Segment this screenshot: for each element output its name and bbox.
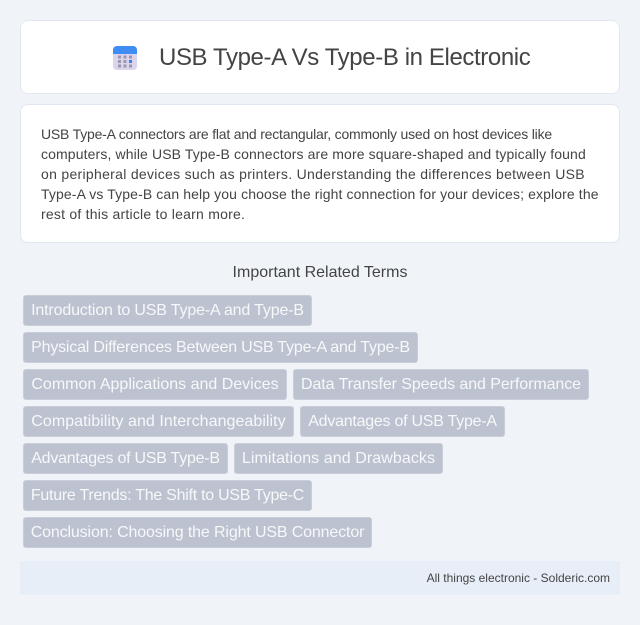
related term tags: Introduction to USB Type-A and Type-B xyxy=(31,302,304,319)
related term tags xyxy=(23,295,589,548)
related term tags: Common Applications and Devices xyxy=(31,376,279,393)
intro text: Type-A vs Type-B can help you choose the right connection for your devices; explore the xyxy=(41,186,599,202)
intro text xyxy=(41,126,599,222)
title: USB Type-A Vs Type-B in Electronic xyxy=(159,44,530,71)
intro text: computers, while USB Type-B connectors are more square-shaped and typically found xyxy=(41,146,586,162)
related term tags: Advantages of USB Type-A xyxy=(308,413,497,430)
title card xyxy=(20,20,620,94)
related term tags: Compatibility and Interchangeability xyxy=(31,413,286,430)
related term tags: Physical Differences Between USB Type-A and Type-B xyxy=(31,339,410,356)
related term tags: Future Trends: The Shift to USB Type-C xyxy=(31,487,304,504)
footer xyxy=(20,561,620,595)
intro text: rest of this article to learn more. xyxy=(41,206,245,222)
related term tags: Data Transfer Speeds and Performance xyxy=(301,376,581,393)
footer: All things electronic - Solderic.com xyxy=(427,571,610,585)
intro text: USB Type-A connectors are flat and rectangular, commonly used on host devices like xyxy=(41,126,552,142)
intro text: on peripheral devices such as printers. Understanding the differences between USB xyxy=(41,166,585,182)
related term tags: Conclusion: Choosing the Right USB Connector xyxy=(31,524,364,541)
related term tags: Advantages of USB Type-B xyxy=(31,450,220,467)
related term tags: Limitations and Drawbacks xyxy=(242,450,435,467)
related terms heading: Important Related Terms xyxy=(233,264,407,281)
intro card xyxy=(20,104,620,243)
icon: calendar xyxy=(113,46,137,70)
